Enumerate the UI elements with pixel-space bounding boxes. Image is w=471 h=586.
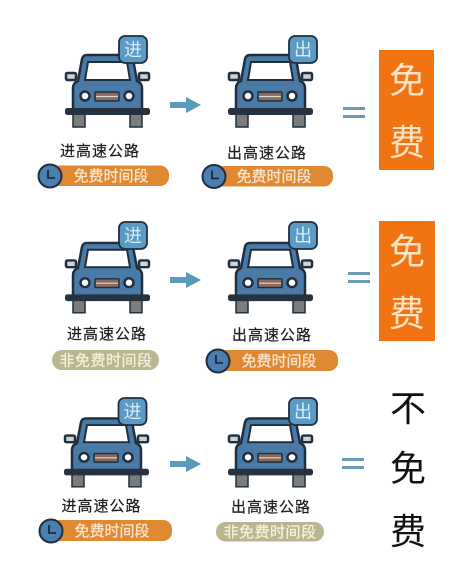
row 1: exit free period pill: 免费时间段 bbox=[236, 168, 312, 186]
row 3: enter free period pill: 免费时间段 bbox=[74, 523, 150, 540]
row 3: equals sign bbox=[342, 458, 364, 469]
badge: exit: 出 bbox=[294, 40, 312, 60]
row 1: free result box: 费 bbox=[389, 122, 425, 163]
row 1: enter label: 进高速公路 bbox=[60, 143, 140, 160]
row 3: enter free period pill bbox=[40, 520, 172, 542]
row 2: equals sign bbox=[348, 272, 370, 283]
row 3: not free result: 费 bbox=[390, 511, 426, 552]
row 1: exit free period pill bbox=[202, 165, 333, 188]
row 2: arrow bbox=[170, 272, 201, 288]
row 2: enter car bbox=[65, 222, 150, 313]
row 1: exit label: 出高速公路 bbox=[227, 145, 307, 162]
badge: exit: 出 bbox=[294, 226, 312, 246]
row 3: not free result: 免 bbox=[390, 448, 426, 489]
row 3: exit label: 出高速公路 bbox=[231, 499, 311, 516]
row 3: exit car bbox=[228, 398, 317, 487]
row 1: enter car bbox=[65, 36, 150, 127]
row 3: non-free period pill: 非免费时间段 bbox=[223, 524, 317, 541]
badge: enter: 进 bbox=[124, 226, 142, 246]
badge: exit: 出 bbox=[294, 402, 312, 422]
row 3: not free result: 不 bbox=[390, 388, 426, 429]
row 2: free result box: 费 bbox=[389, 293, 425, 334]
row 2: enter label: 进高速公路 bbox=[67, 326, 147, 343]
row 3: enter car bbox=[64, 398, 149, 487]
row 2: free result box bbox=[379, 221, 435, 341]
badge: enter: 进 bbox=[124, 40, 142, 60]
row 1: free result box: 免 bbox=[389, 60, 425, 101]
row 2: exit label: 出高速公路 bbox=[232, 327, 312, 344]
row 2: exit free period pill: 免费时间段 bbox=[241, 353, 317, 370]
row 1: car exit bbox=[228, 36, 317, 127]
row 2: non-free period pill: 非免费时间段 bbox=[59, 352, 153, 370]
row 1: equals sign bbox=[343, 107, 365, 118]
row 1: arrow bbox=[170, 97, 201, 113]
row 1: enter free period pill: 免费时间段 bbox=[73, 168, 149, 185]
row 3: enter label: 进高速公路 bbox=[61, 498, 142, 515]
row 2: exit free period pill bbox=[206, 350, 338, 372]
row 2: free result box: 免 bbox=[389, 231, 425, 272]
row 3: arrow bbox=[170, 456, 201, 472]
badge: enter: 进 bbox=[124, 402, 142, 422]
row 2: exit car bbox=[228, 222, 317, 313]
row 3: not free result bbox=[390, 388, 426, 552]
row 1: free result box bbox=[379, 50, 434, 170]
row 1: enter free period pill bbox=[38, 164, 169, 188]
